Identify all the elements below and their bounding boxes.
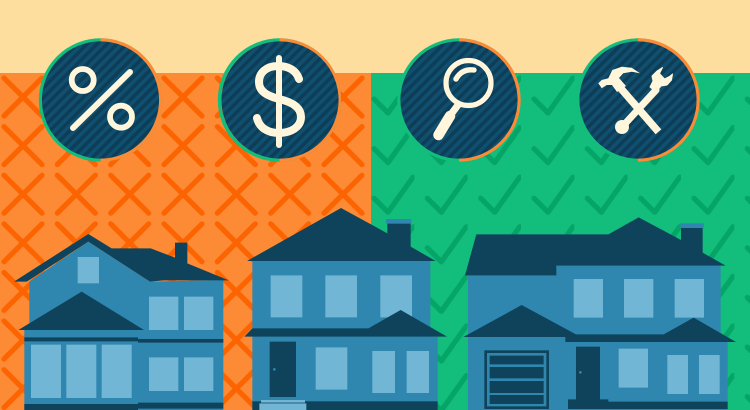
panel: green side with check pattern (371, 73, 750, 410)
chimney cap (680, 223, 704, 228)
house: left (14, 234, 229, 410)
windows (31, 297, 213, 398)
lower windows (316, 347, 429, 393)
house: middle (244, 208, 447, 410)
chimney cap (386, 219, 411, 224)
icon: hammer and wrench badge (578, 40, 698, 160)
lower roof (463, 305, 736, 342)
porch roof (244, 310, 447, 337)
icon: percent badge (40, 40, 161, 160)
house walls (24, 242, 223, 410)
main roof with chimney (465, 217, 726, 275)
background: cream top band (0, 0, 750, 73)
panel: orange side with X pattern (0, 73, 371, 410)
door knob (273, 368, 276, 371)
door (576, 347, 600, 400)
steps (259, 400, 306, 410)
floor bands (24, 337, 223, 410)
house: right (463, 217, 736, 410)
house walls (252, 261, 438, 409)
garage door (484, 350, 549, 409)
dormer window (78, 257, 99, 283)
icon: dollar badge (220, 40, 340, 160)
upper windows (271, 275, 412, 317)
door knob (579, 371, 582, 374)
upper windows (574, 279, 704, 318)
foundation (252, 401, 438, 410)
lower windows (619, 349, 720, 394)
door (270, 342, 296, 397)
house walls (468, 266, 728, 410)
main roof with chimney (247, 208, 436, 261)
foundation and step (568, 399, 728, 409)
lower roof (18, 292, 144, 330)
main roof (14, 234, 229, 282)
icon: magnifying glass badge (399, 40, 519, 160)
